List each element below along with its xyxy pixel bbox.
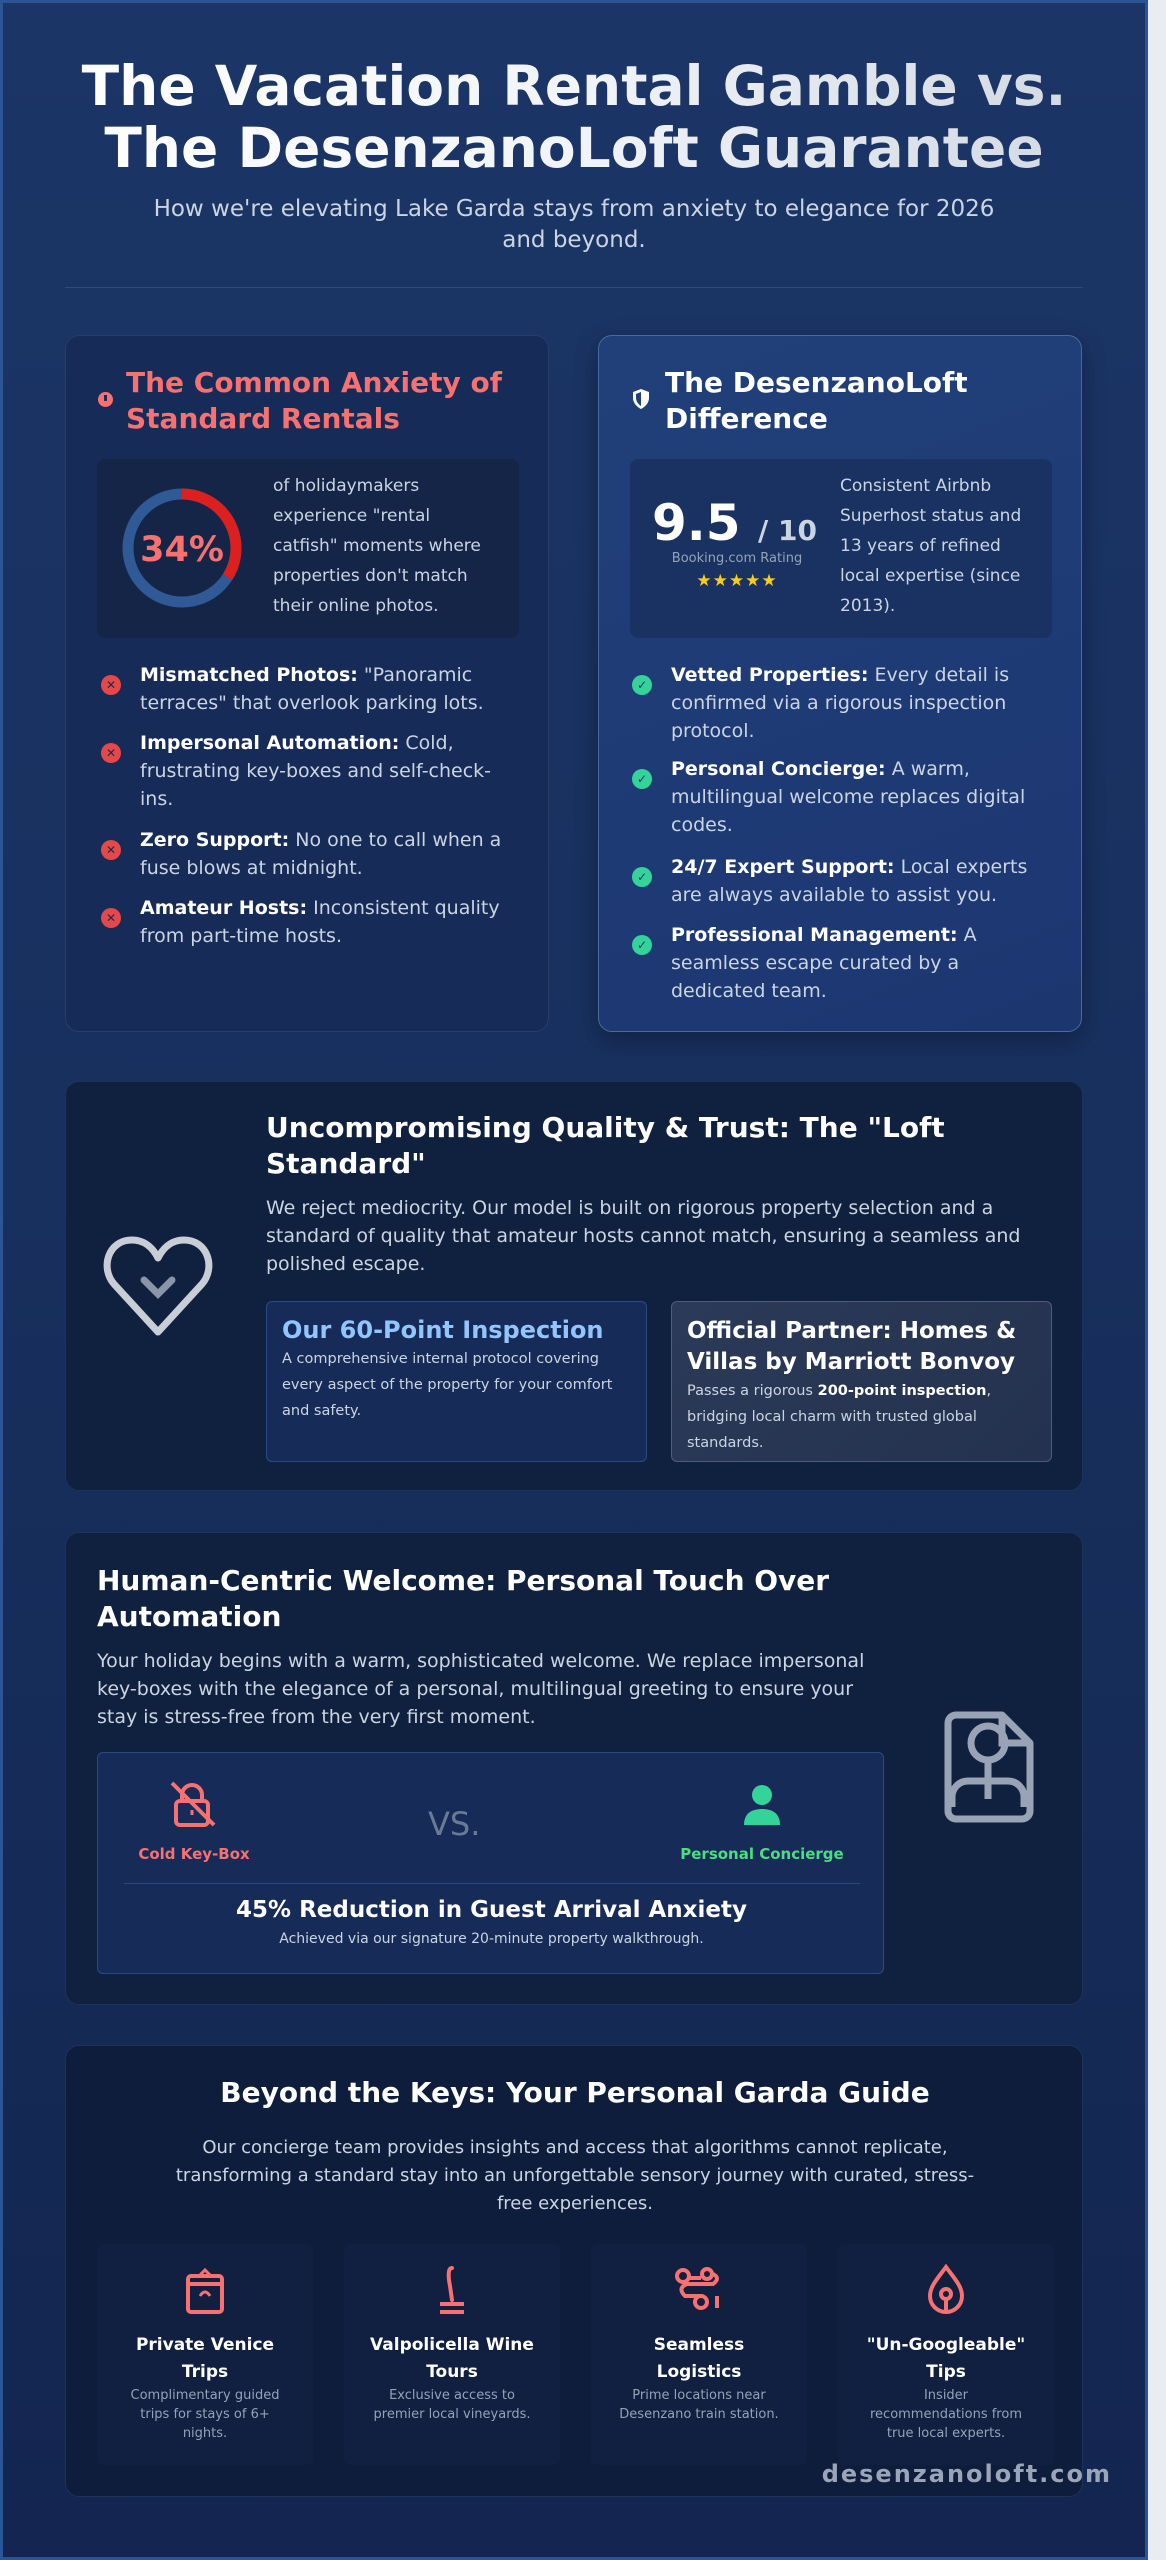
heading: anxiety xyxy=(126,366,502,435)
feature: venice: Private Venice Trips xyxy=(136,2335,274,2382)
comparison box xyxy=(97,1752,884,1974)
icon: heart xyxy=(104,1236,212,1336)
feature: wine tours xyxy=(344,2244,560,2465)
donut chart xyxy=(122,488,242,608)
heading: welcome: Human-Centric Welcome: Personal Touch Over Automation xyxy=(97,1564,829,1633)
comparison box: Cold Key-Box xyxy=(138,1845,250,1863)
icon: crossed lock xyxy=(170,1782,216,1827)
feature: wine tours: Valpolicella Wine Tours xyxy=(370,2335,534,2382)
feature: venice: Complimentary guided trips for stays of 6+ nights. xyxy=(131,2388,279,2441)
feature: logistics xyxy=(591,2244,807,2465)
title: The DesenzanoLoft Guarantee xyxy=(104,116,1044,180)
panel: personal garda guide xyxy=(65,2045,1083,2497)
paragraph: Your holiday begins with a warm, sophisticated welcome. We replace impersonal key-boxes with the elegance of a personal, multilingual greeting to ensure your stay is stress-free from the very first moment. xyxy=(97,1650,864,1728)
stat text: of holidaymakers experience "rental catfish" moments where properties don't match their online photos. xyxy=(273,476,481,616)
stars: ★★★★★ xyxy=(696,571,778,591)
feature: logistics: Prime locations near Desenzano train station. xyxy=(619,2388,779,2422)
icon: profile document xyxy=(944,1712,1034,1822)
list: problems: ✕ xyxy=(106,678,116,692)
title: The Vacation Rental Gamble vs. xyxy=(82,54,1066,118)
rating box xyxy=(630,459,1052,638)
list: benefits: ✓ xyxy=(637,772,647,786)
list: problems: Impersonal Automation: Cold, frustrating key-boxes and self-check-ins. xyxy=(140,732,491,810)
heading: difference xyxy=(665,366,968,435)
feature: wine tours: Exclusive access to premier local vineyards. xyxy=(374,2388,530,2422)
donut chart: 34% xyxy=(140,530,224,570)
box: 60-point inspection xyxy=(266,1301,647,1462)
list: benefits: Professional Management: A seamless escape curated by a dedicated team. xyxy=(671,924,977,1002)
stat: 45% reduction: 45% Reduction in Guest Arrival Anxiety xyxy=(236,1897,747,1923)
rating 9.5: 9.5 / 10 xyxy=(652,494,817,552)
feature: un-googleable tips: Tips xyxy=(926,2362,966,2382)
icon: shield xyxy=(633,389,649,409)
vs: VS. xyxy=(428,1805,480,1843)
subtitle: How we're elevating Lake Garda stays from anxiety to elegance for 2026 and beyond. xyxy=(154,196,994,253)
rating box: Booking.com Rating xyxy=(672,551,802,566)
list: problems: ✕ xyxy=(106,911,116,925)
list: benefits xyxy=(632,664,1027,1002)
feature: logistics: Logistics xyxy=(657,2362,741,2382)
list: benefits: ✓ xyxy=(637,678,647,692)
list: problems: Mismatched Photos: "Panoramic terraces" that overlook parking lots. xyxy=(140,664,484,714)
box: marriott partner: Official Partner: Homes & Villas by Marriott Bonvoy xyxy=(687,1318,1016,1375)
list: problems xyxy=(101,664,501,947)
title xyxy=(0,55,1148,179)
feature: un-googleable tips: Insider recommendations from true local experts. xyxy=(870,2388,1022,2441)
panel: loft standard xyxy=(65,1081,1083,1491)
heading: difference: The DesenzanoLoft xyxy=(665,366,968,399)
heading: difference: Difference xyxy=(665,402,828,435)
box: 60-point inspection: Our 60-Point Inspection xyxy=(282,1316,604,1344)
feature: un-googleable tips: "Un-Googleable" xyxy=(867,2335,1025,2355)
box: marriott partner: Passes a rigorous 200-point inspection, bridging local charm with trusted global standards. xyxy=(687,1383,991,1451)
stat box 34% xyxy=(97,459,519,638)
heading: anxiety: Standard Rentals xyxy=(126,402,400,435)
paragraph: Our concierge team provides insights and access that algorithms cannot replicate, transforming a standard stay into an unforgettable sensory journey with curated, stress-free experiences. xyxy=(176,2137,974,2214)
icon: alert xyxy=(98,392,113,407)
comparison box: Achieved via our signature 20-minute property walkthrough. xyxy=(279,1931,704,1947)
list: benefits: ✓ xyxy=(637,870,647,884)
feature: logistics: Seamless xyxy=(654,2335,744,2355)
heading: garda guide: Beyond the Keys: Your Personal Garda Guide xyxy=(220,2076,930,2109)
list: problems: ✕ xyxy=(106,746,116,760)
box: marriott partner xyxy=(671,1301,1052,1462)
list: benefits: ✓ xyxy=(637,938,647,952)
footer: website: desenzanoloft.com xyxy=(822,2460,1112,2488)
heading: loft standard: Uncompromising Quality & Trust: The "Loft Standard" xyxy=(266,1111,945,1180)
list: problems: Amateur Hosts: Inconsistent quality from part-time hosts. xyxy=(140,897,500,947)
feature: un-googleable tips xyxy=(838,2244,1054,2465)
list: problems: Zero Support: No one to call when a fuse blows at midnight. xyxy=(140,829,501,879)
list: benefits: Personal Concierge: A warm, multilingual welcome replaces digital codes. xyxy=(671,758,1025,836)
panel: human-centric welcome xyxy=(65,1532,1083,2005)
box: 60-point inspection: A comprehensive internal protocol covering every aspect of the property for your comfort and safety. xyxy=(282,1351,612,1419)
paragraph: We reject mediocrity. Our model is built on rigorous property selection and a standard of quality that amateur hosts cannot match, ensuring a seamless and polished escape. xyxy=(266,1197,1020,1275)
icon: person xyxy=(744,1785,780,1825)
comparison box: Personal Concierge xyxy=(680,1845,844,1863)
heading: anxiety: The Common Anxiety of xyxy=(126,366,502,399)
feature: venice xyxy=(97,2244,313,2465)
panel: common anxiety xyxy=(65,335,549,1032)
panel: desenzanoloft difference xyxy=(598,335,1082,1032)
list: benefits: Vetted Properties: Every detail is confirmed via a rigorous inspection protocol. xyxy=(671,664,1009,742)
rating box: Consistent Airbnb Superhost status and 13 years of refined local expertise (since 2013). xyxy=(840,476,1021,616)
list: benefits: 24/7 Expert Support: Local experts are always available to assist you. xyxy=(671,856,1027,906)
list: problems: ✕ xyxy=(106,843,116,857)
